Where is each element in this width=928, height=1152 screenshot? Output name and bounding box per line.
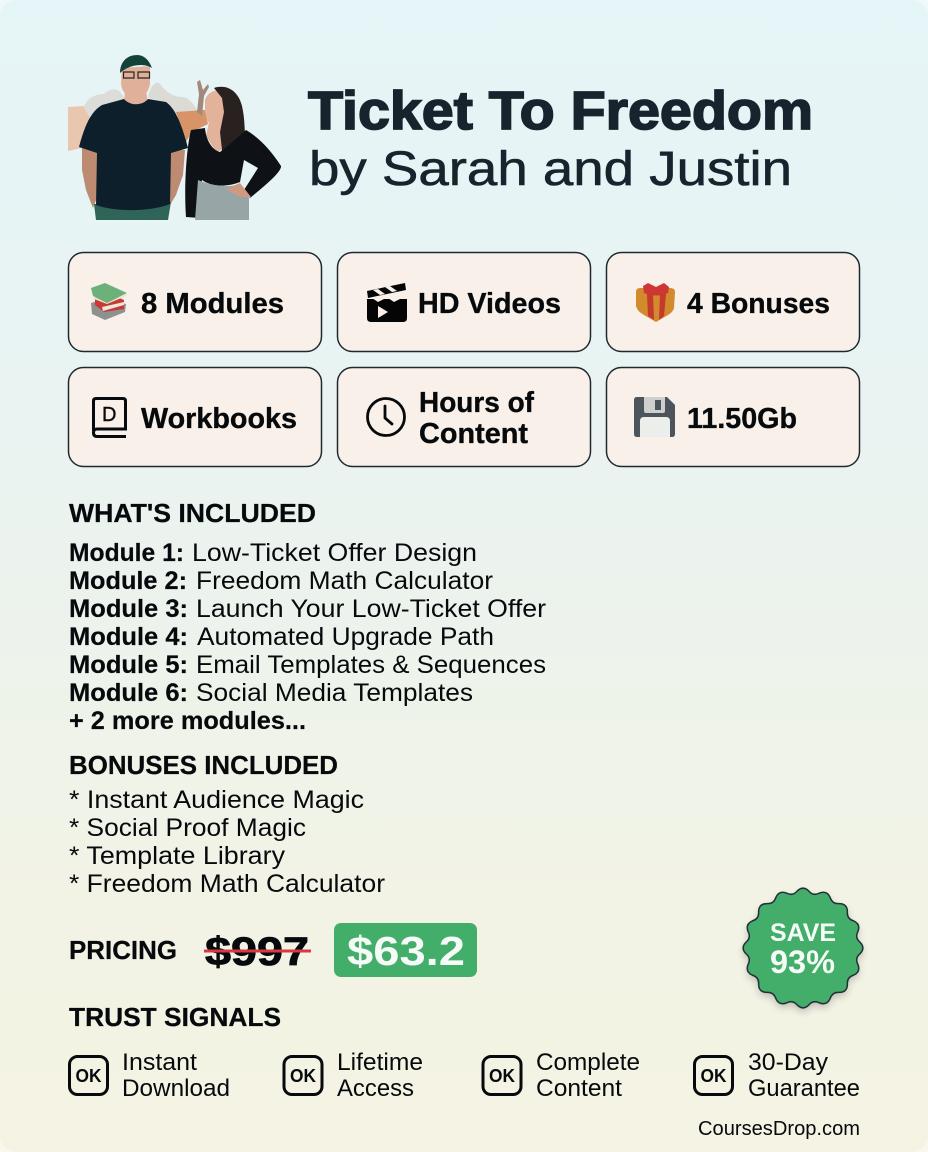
bonus 2: * Social Proof Magic [69, 814, 306, 842]
card: Hours of Content [338, 368, 590, 466]
trust: complete content: Complete [536, 1049, 640, 1076]
icon: clapperboard [367, 283, 407, 322]
title: Ticket To Freedom [308, 81, 813, 141]
woman: hair [214, 87, 246, 178]
heading: what's included: WHAT'S INCLUDED [69, 498, 316, 528]
icon: gift box [636, 283, 675, 322]
module 3: Launch Your Low-Ticket Offer [196, 595, 546, 623]
trust: complete content [483, 1049, 640, 1102]
section: pricing [69, 923, 477, 977]
woman: black top and arm [185, 128, 281, 218]
man: trousers [94, 202, 171, 220]
icon: clock [368, 398, 404, 436]
module 4: Automated Upgrade Path [197, 623, 494, 651]
trust: lifetime access [284, 1049, 423, 1102]
module 6: Module 6: [69, 679, 188, 707]
more modules: + 2 more modules... [69, 707, 306, 735]
icon: workbook: D [102, 404, 116, 426]
bonus 3: * Template Library [69, 842, 286, 870]
badge: save 93%: 93% [770, 944, 835, 980]
icon: stack of books [91, 283, 127, 320]
card: Workbooks [68, 368, 322, 466]
bonus 1: * Instant Audience Magic [69, 786, 364, 814]
card: Workbooks: Workbooks [141, 403, 297, 435]
trust: lifetime access: OK [290, 1065, 317, 1086]
trust: 30-day guarantee [694, 1049, 860, 1102]
module 1: Module 1: [69, 539, 184, 567]
module 5: Email Templates & Sequences [196, 651, 546, 679]
photo scenery backdrop [68, 80, 209, 151]
heading: pricing: PRICING [69, 935, 177, 965]
woman: head [205, 90, 232, 152]
trust: 30-day guarantee: 30-Day [748, 1049, 828, 1076]
module 2: Freedom Math Calculator [196, 567, 493, 595]
trust: complete content: Content [536, 1075, 622, 1102]
module 6: Social Media Templates [196, 679, 473, 707]
card: 8 Modules: 8 Modules [141, 288, 284, 320]
card: Hours of Content: Hours of [419, 387, 534, 419]
section: what's included [69, 498, 546, 735]
old price: $997 [205, 930, 309, 974]
trust: 30-day guarantee: OK [700, 1065, 727, 1086]
card: 4 Bonuses: 4 Bonuses [687, 288, 830, 320]
trust: instant download [70, 1049, 230, 1102]
module 4 [69, 623, 494, 651]
icon: workbook [94, 398, 126, 436]
card: Hours of Content: Content [419, 418, 529, 450]
man: arms [82, 148, 185, 208]
heading: bonuses included: BONUSES INCLUDED [69, 750, 338, 780]
module 3: Module 3: [69, 595, 188, 623]
bonus 4: * Freedom Math Calculator [69, 870, 385, 898]
new price: $63.2 [347, 928, 465, 974]
card: HD Videos: HD Videos [418, 288, 561, 320]
section: bonuses included [69, 750, 385, 898]
module 1 [69, 539, 477, 567]
woman: jeans [195, 180, 249, 220]
badge: save 93%: SAVE [770, 919, 836, 947]
module 6 [69, 679, 473, 707]
trust: instant download: OK [76, 1065, 102, 1086]
module 4: Module 4: [69, 623, 188, 651]
man: head [121, 66, 150, 108]
title block [308, 81, 813, 196]
card: HD Videos [338, 252, 590, 352]
module 3 [69, 595, 546, 623]
heading: trust signals: TRUST SIGNALS [69, 1002, 281, 1032]
woman: hand [226, 183, 251, 197]
subtitle: by Sarah and Justin [309, 143, 792, 196]
module 2 [69, 567, 493, 595]
trust: lifetime access: Lifetime [337, 1049, 423, 1076]
badge: save 93% [743, 888, 863, 1012]
module 5: Module 5: [69, 651, 188, 679]
trust: instant download: Download [122, 1075, 230, 1102]
new price [334, 923, 477, 977]
icon: floppy disk [634, 397, 675, 437]
section: trust signals [69, 1002, 860, 1102]
card: 11.50Gb [606, 368, 860, 466]
card: 4 Bonuses [606, 252, 860, 352]
trust: instant download: Instant [122, 1049, 197, 1076]
trust: lifetime access: Access [337, 1075, 414, 1102]
man: navy t-shirt [79, 99, 188, 210]
trust: 30-day guarantee: Guarantee [748, 1075, 860, 1102]
card: 8 Modules [68, 252, 322, 352]
man: cap [120, 55, 152, 73]
photo: Sarah and Justin [68, 55, 281, 220]
man: glasses [124, 72, 150, 78]
trust: complete content: OK [489, 1065, 516, 1086]
footer: site name: CoursesDrop.com [698, 1118, 860, 1140]
module 1: Low-Ticket Offer Design [192, 539, 477, 567]
module 2: Module 2: [69, 567, 187, 595]
card: 11.50Gb: 11.50Gb [687, 403, 797, 435]
